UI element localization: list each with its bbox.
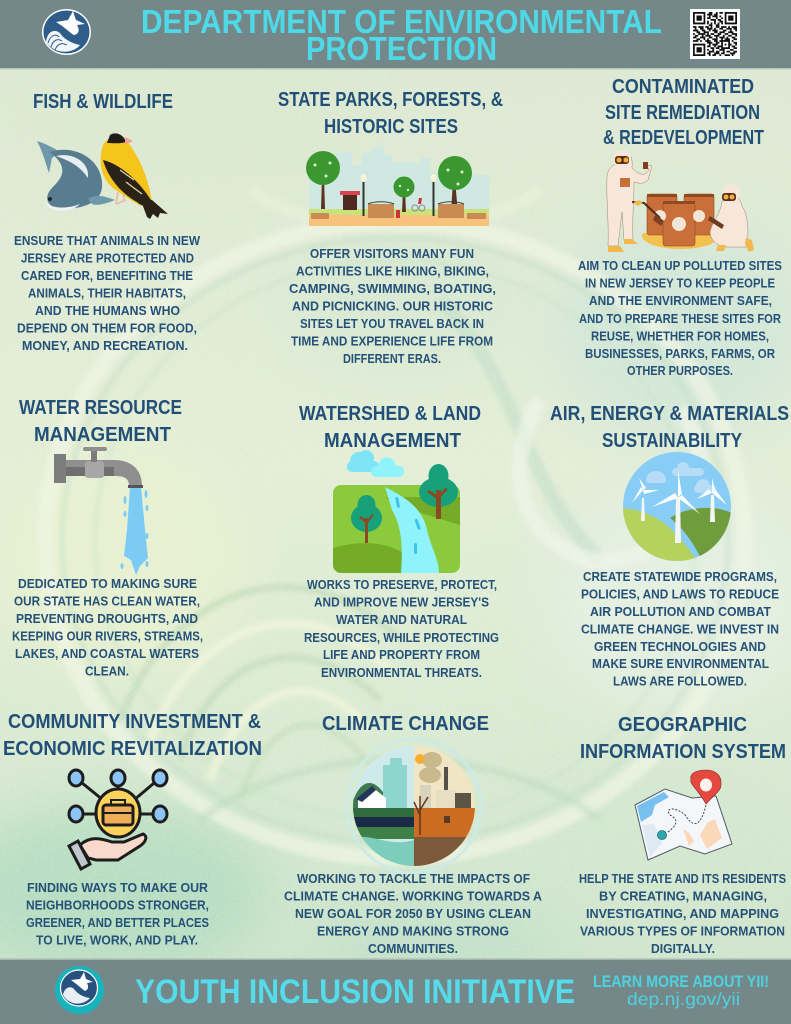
text: learn more link: dep.nj.gov/yii: [627, 989, 740, 1009]
panel: contaminated sites: [578, 75, 782, 378]
text: fish & wildlife description: MONEY, AND RECREATION.: [22, 338, 188, 353]
icon: wind turbines: [623, 452, 731, 561]
text: learn more link: [593, 972, 769, 1009]
text: watershed description: WORKS TO PRESERVE, PROTECT,: [307, 577, 497, 592]
text: watershed description: RESOURCES, WHILE PROTECTING: [304, 630, 499, 645]
text: state parks description: DIFFERENT ERAS.: [343, 351, 441, 366]
heading: watershed & land management: WATERSHED & LAND: [299, 402, 481, 425]
text: fish & wildlife description: DEPEND ON THEM FOR FOOD,: [17, 320, 197, 336]
heading: contaminated site remediation: [603, 75, 764, 149]
panel: watershed & land management: [299, 402, 499, 680]
icon: city park: [306, 147, 489, 226]
heading: community investment & economic revitalization: ECONOMIC REVITALIZATION: [3, 737, 262, 760]
text: state parks description: [289, 246, 496, 366]
text: state parks description: SITES LET YOU TRAVEL BACK IN: [300, 316, 484, 331]
icon: hand holding briefcase network: [69, 770, 167, 869]
icon: climate split circle: [347, 739, 481, 873]
text: youth inclusion initiative: YOUTH INCLUSION INITIATIVE: [135, 973, 575, 1011]
text: contaminated sites description: AND THE ENVIRONMENT SAFE,: [589, 293, 772, 308]
panel: fish & wildlife: [14, 90, 201, 353]
heading: air, energy & materials sustainability: [550, 402, 789, 452]
text: air, energy description: MAKE SURE ENVIRONMENTAL: [592, 656, 769, 671]
text: GIS description: INVESTIGATING, AND MAPPING: [586, 906, 779, 921]
text: watershed description: AND IMPROVE NEW JERSEY'S: [314, 594, 489, 610]
text: community investment description: GREENER, AND BETTER PLACES: [26, 915, 209, 930]
text: climate change description: [284, 871, 543, 956]
text: GIS description: [579, 871, 786, 956]
text: community investment description: TO LIVE, WORK, AND PLAY.: [36, 932, 198, 948]
text: air, energy description: GREEN TECHNOLOGIES AND: [594, 639, 766, 654]
icon: QR code: [690, 9, 740, 59]
panel: air, energy & materials: [550, 402, 789, 688]
text: watershed description: ENVIRONMENTAL THREATS.: [321, 665, 482, 680]
text: fish & wildlife description: ENSURE THAT ANIMALS IN NEW: [14, 233, 201, 248]
text: contaminated sites description: REUSE, WHETHER FOR HOMES,: [591, 328, 769, 344]
heading: fish & wildlife: FISH & WILDLIFE: [33, 90, 173, 113]
heading: climate change: CLIMATE CHANGE: [322, 712, 489, 735]
text: state parks description: CAMPING, SWIMMING, BOATING,: [289, 281, 496, 296]
heading: state parks, forests & historic sites: [278, 88, 503, 138]
icon: landscape with river and trees: [333, 450, 460, 573]
icon: DEP logo: [42, 9, 91, 55]
icon: faucet with water: [54, 447, 148, 575]
icon: workers and barrels: [607, 150, 754, 252]
text: air, energy description: LAWS ARE FOLLOWED.: [613, 674, 747, 688]
panel: community investment: [3, 710, 262, 948]
panel: geographic information system: [579, 713, 786, 956]
heading: geographic information system: [580, 713, 786, 763]
panel: water resource management: [12, 396, 203, 678]
text: state parks description: ACTIVITIES LIKE HIKING, BIKING,: [296, 264, 489, 278]
text: state parks description: AND PICNICKING. OUR HISTORIC: [292, 298, 494, 314]
text: water resource description: DEDICATED TO MAKING SURE: [18, 576, 197, 591]
text: fish & wildlife description: AND THE HUMANS WHO: [35, 303, 180, 318]
text: water resource description: PREVENTING DROUGHTS, AND: [16, 611, 198, 626]
icon: Youth Inclusion Initiative logo: [55, 966, 104, 1014]
text: watershed description: LIFE AND PROPERTY FROM: [323, 647, 480, 662]
text: air, energy description: AIR POLLUTION AND COMBAT: [590, 604, 771, 619]
text: water resource description: LAKES, AND COASTAL WATERS: [15, 646, 199, 661]
heading: watershed & land management: MANAGEMENT: [324, 429, 461, 452]
icon: fish and goldfinch: [37, 133, 168, 219]
heading: water resource management: WATER RESOURCE: [19, 396, 182, 419]
header band: [0, 0, 791, 70]
text: water resource description: CLEAN.: [85, 664, 129, 678]
heading: state parks, forests & historic sites: HISTORIC SITES: [324, 115, 458, 138]
title: [141, 4, 662, 68]
panel: state parks: [278, 88, 503, 366]
text: state parks description: OFFER VISITORS MANY FUN: [310, 246, 474, 261]
text: contaminated sites description: OTHER PURPOSES.: [627, 363, 733, 378]
text: GIS description: DIGITALLY.: [651, 941, 715, 956]
heading: state parks, forests & historic sites: STATE PARKS, FORESTS, &: [278, 88, 503, 111]
text: fish & wildlife description: [14, 233, 201, 353]
text: climate change description: CLIMATE CHANGE. WORKING TOWARDS A: [284, 888, 543, 904]
text: fish & wildlife description: JERSEY ARE PROTECTED AND: [21, 250, 194, 266]
text: climate change description: ENERGY AND MAKING STRONG: [317, 924, 509, 938]
title: PROTECTION: [306, 31, 497, 68]
heading: water resource management: [19, 396, 182, 446]
heading: community investment & economic revitalization: COMMUNITY INVESTMENT &: [8, 710, 261, 733]
heading: contaminated site remediation: CONTAMINATED: [612, 75, 754, 98]
text: air, energy description: CLIMATE CHANGE. WE INVEST IN: [581, 622, 779, 636]
text: water resource description: OUR STATE HAS CLEAN WATER,: [14, 594, 200, 608]
heading: air, energy & materials sustainability: SUSTAINABILITY: [602, 429, 742, 452]
text: fish & wildlife description: ANIMALS, THEIR HABITATS,: [28, 286, 186, 300]
heading: geographic information system: GEOGRAPHIC: [618, 713, 747, 736]
panel: climate change: [284, 712, 543, 956]
text: air, energy description: [581, 569, 779, 688]
text: GIS description: BY CREATING, MANAGING,: [599, 888, 767, 904]
text: community investment description: NEIGHBORHOODS STRONGER,: [26, 898, 209, 912]
text: community investment description: [26, 880, 209, 948]
heading: water resource management: MANAGEMENT: [34, 423, 171, 446]
heading: community investment & economic revitalization: [3, 710, 262, 760]
text: state parks description: TIME AND EXPERIENCE LIFE FROM: [291, 334, 493, 348]
text: community investment description: FINDING WAYS TO MAKE OUR: [27, 880, 209, 895]
title: DEPARTMENT OF ENVIRONMENTAL: [141, 4, 662, 41]
text: watershed description: [304, 577, 499, 680]
text: water resource description: KEEPING OUR RIVERS, STREAMS,: [12, 628, 203, 644]
text: climate change description: NEW GOAL FOR 2050 BY USING CLEAN: [295, 906, 531, 921]
text: fish & wildlife description: CARED FOR, BENEFITING THE: [21, 268, 193, 283]
heading: watershed & land management: [299, 402, 481, 452]
footer band: [0, 958, 791, 1024]
text: climate change description: WORKING TO TACKLE THE IMPACTS OF: [297, 871, 530, 886]
text: contaminated sites description: [578, 258, 782, 378]
text: climate change description: COMMUNITIES.: [368, 941, 458, 956]
icon: map with location pin: [635, 770, 732, 860]
text: water resource description: [12, 576, 203, 678]
text: watershed description: WATER AND NATURAL: [336, 612, 467, 627]
